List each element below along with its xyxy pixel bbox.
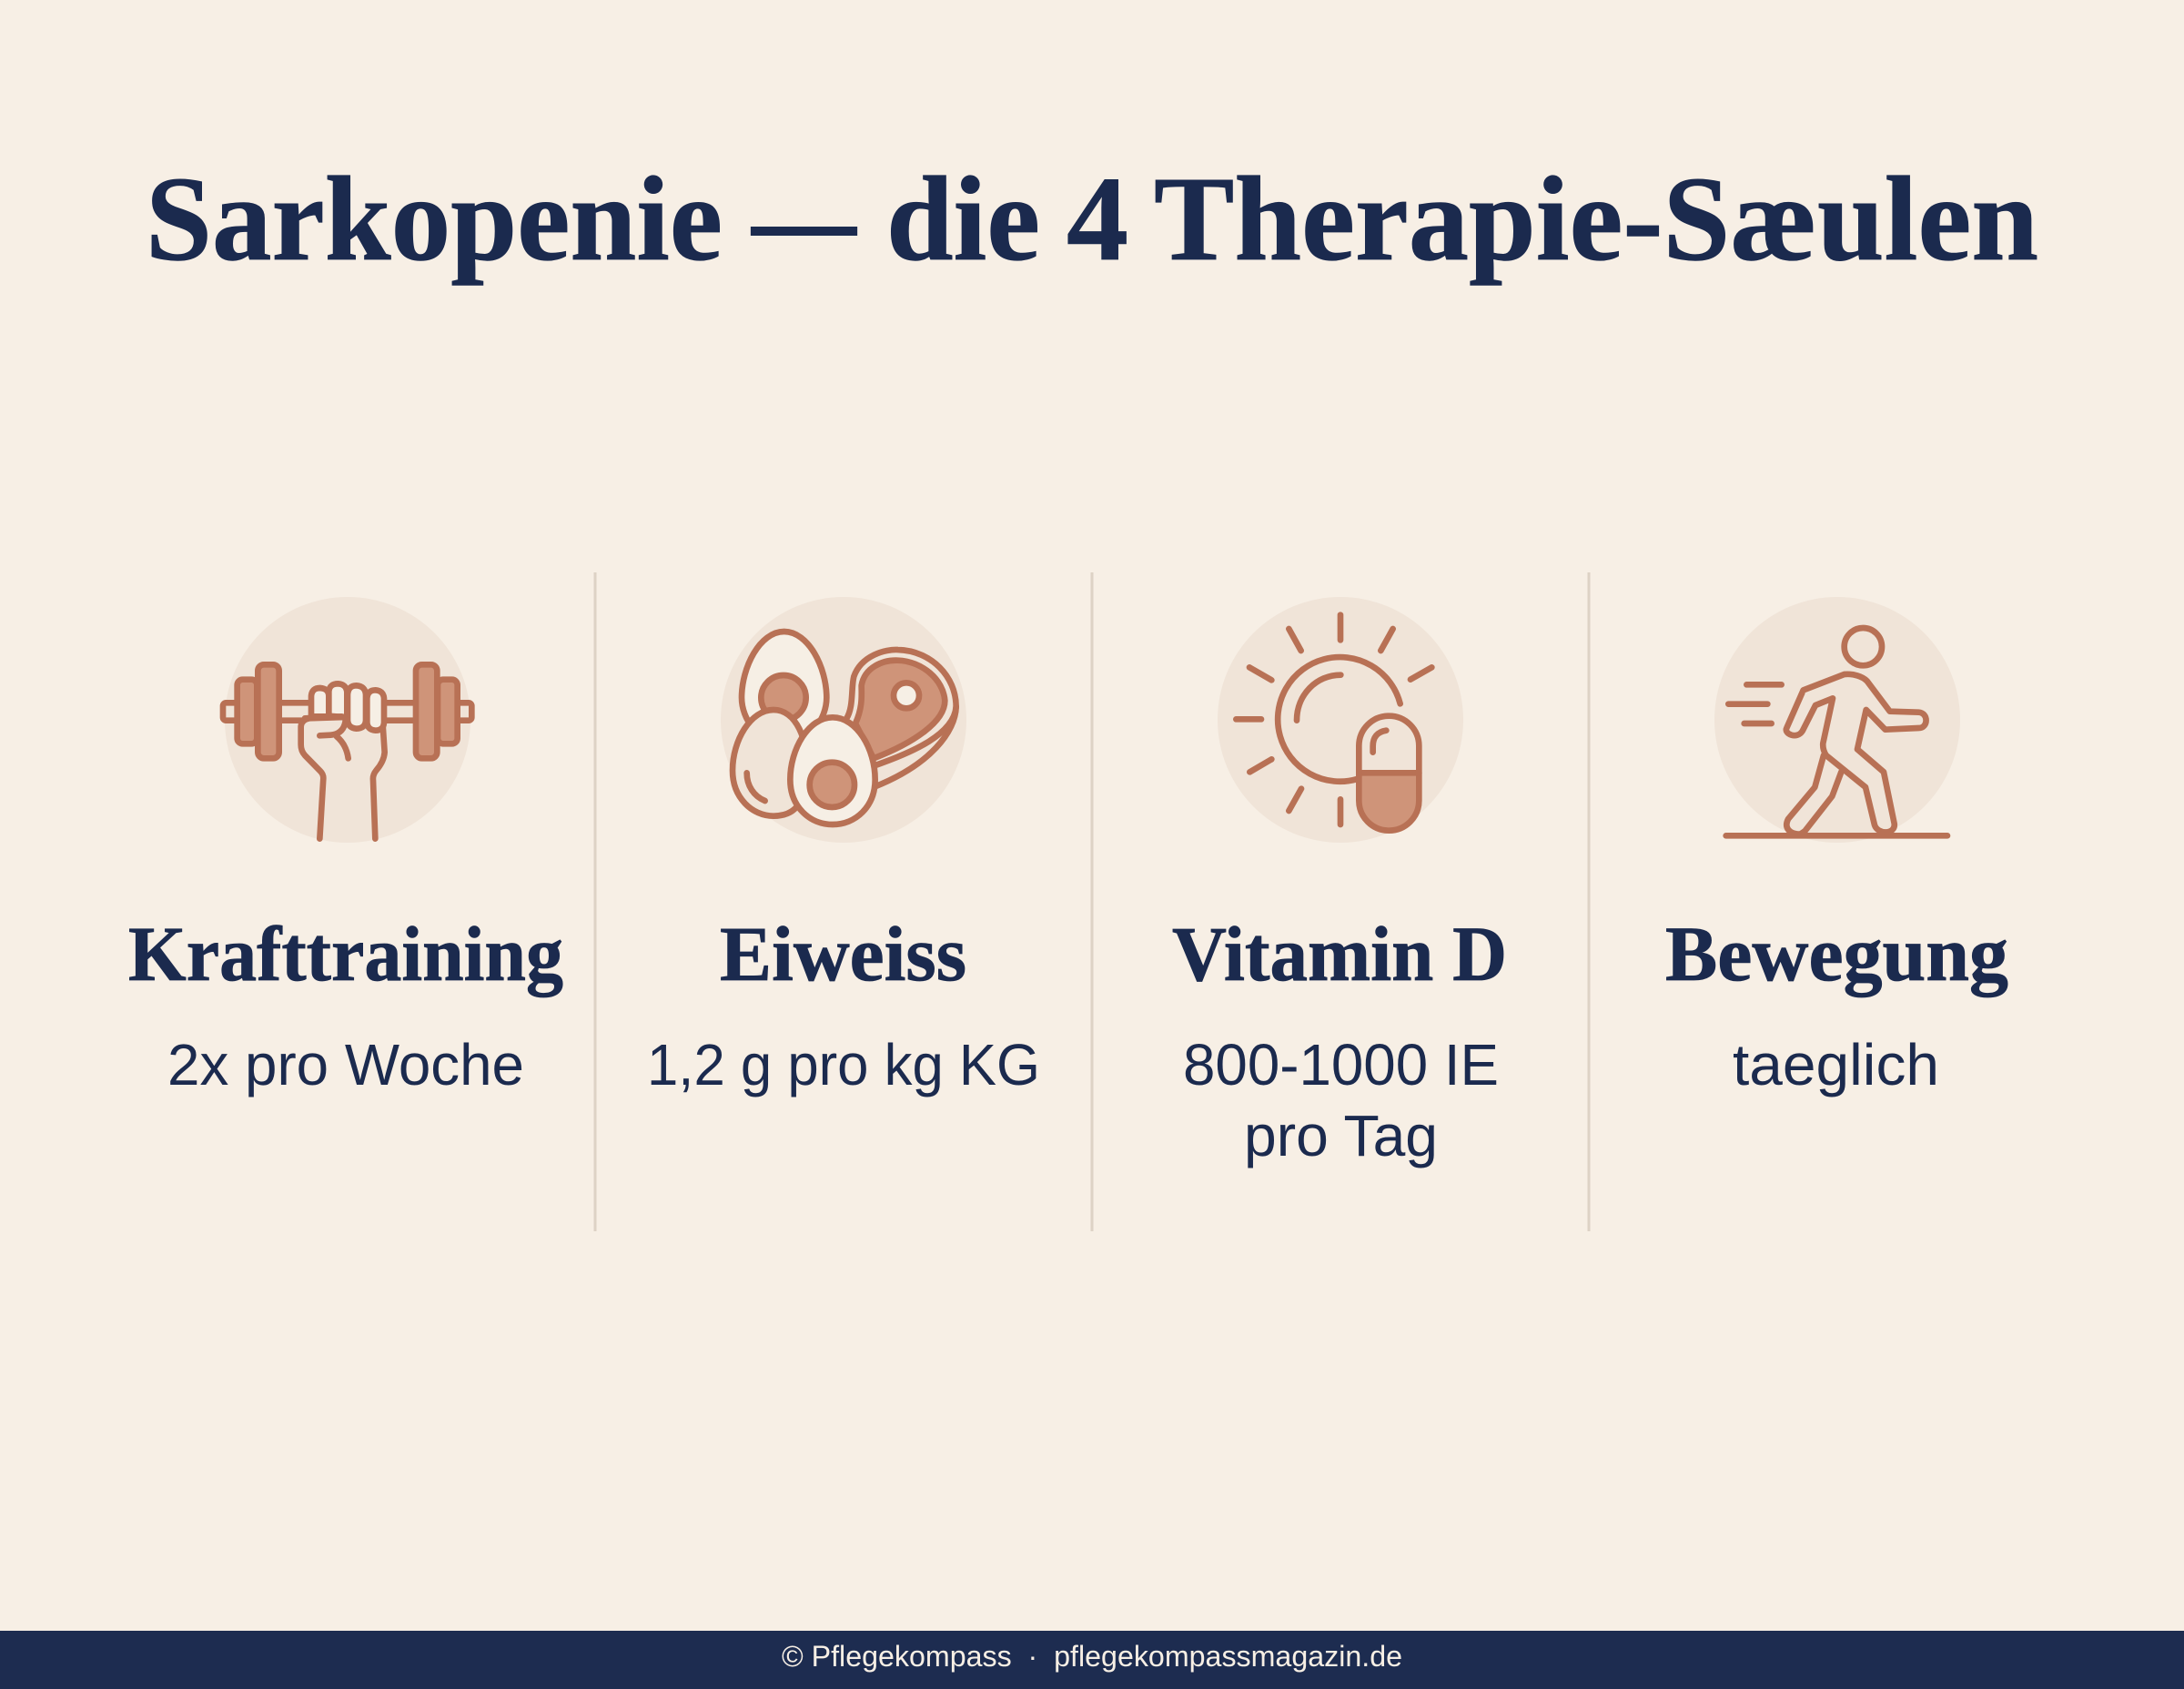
icon: eggs and steak (721, 597, 966, 843)
panel: Eiweiss (647, 597, 1040, 1097)
panel: Krafttraining (128, 597, 563, 1097)
text: 800-1000 IE pro Tag: 800-1000 IE (1183, 1032, 1499, 1097)
icon: dumbbell and fist (223, 597, 471, 843)
text: 800-1000 IE pro Tag: pro Tag (1244, 1103, 1438, 1168)
text: 1,2 g pro kg KG: 1,2 g pro kg KG (647, 1032, 1040, 1097)
title: die (886, 151, 1040, 286)
title: Sarkopenie (146, 151, 723, 286)
heading: Bewegung: Bewegung (1665, 910, 2008, 997)
title: — (751, 151, 857, 286)
text: taeglich: taeglich (1733, 1032, 1939, 1097)
panel: Bewegung (1665, 597, 2008, 1097)
footer bar (0, 1631, 2184, 1689)
icon: sun and capsule (1218, 597, 1463, 843)
title (146, 151, 2038, 286)
footer text: © Pflegekompass · pflegekompassmagazin.de (782, 1640, 1402, 1673)
icon: walking person (1714, 597, 1960, 843)
title: 4 (1067, 151, 1128, 286)
heading: Krafttraining: Krafttraining (128, 910, 563, 997)
heading: Vitamin D: Vitamin D (1172, 910, 1507, 997)
panel: Vitamin D (1172, 597, 1507, 1168)
text: 800-1000 IE pro Tag (1183, 1032, 1499, 1168)
heading: Eiweiss: Eiweiss (720, 910, 966, 997)
text: 2x pro Woche: 2x pro Woche (167, 1032, 524, 1097)
title: Therapie-Sæulen (1154, 151, 2038, 286)
